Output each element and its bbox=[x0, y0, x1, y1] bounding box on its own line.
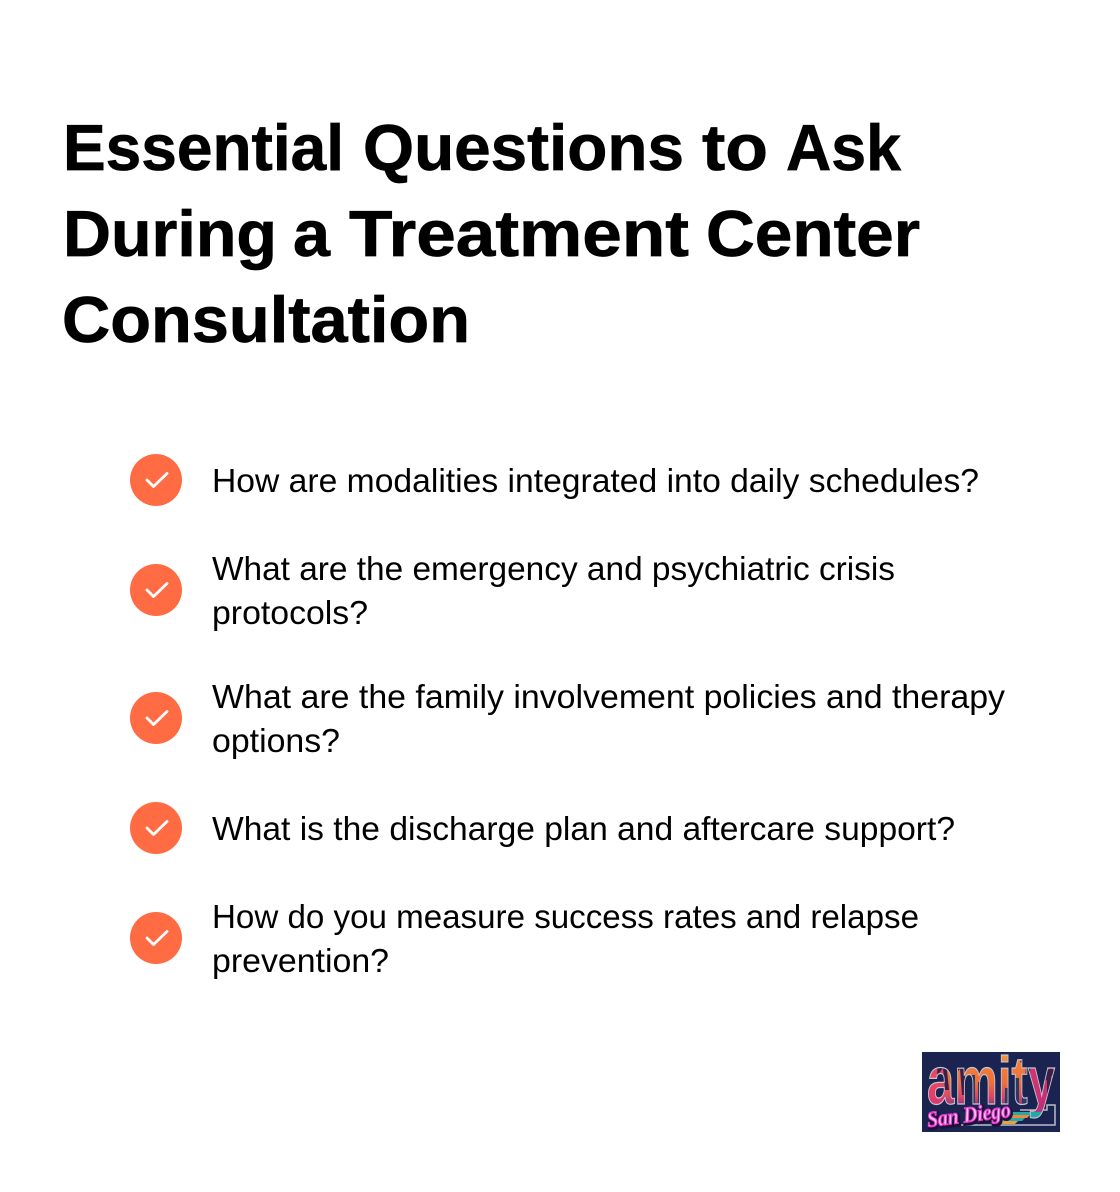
logo stripes bbox=[998, 1112, 1037, 1124]
item 1: How are modalities integrated into daily schedules? bbox=[212, 463, 979, 500]
title: Treatment bbox=[349, 197, 689, 270]
logo: Amity San Diego bbox=[922, 1043, 1060, 1133]
item 2: protocols? bbox=[212, 595, 368, 632]
logo script text: San Diego bbox=[927, 1098, 1013, 1133]
item 2 bbox=[130, 551, 895, 632]
title: Questions bbox=[363, 111, 684, 184]
title: During bbox=[63, 197, 277, 270]
item 3: options? bbox=[212, 723, 340, 760]
item 4: What is the discharge plan and aftercare support? bbox=[212, 811, 955, 848]
item 1 bbox=[130, 454, 979, 506]
title bbox=[62, 111, 920, 356]
title: a bbox=[293, 197, 331, 270]
logo wordmark: amity bbox=[927, 1043, 1055, 1119]
title: Essential bbox=[63, 111, 344, 184]
item 4 bbox=[130, 802, 955, 854]
title: Ask bbox=[786, 111, 902, 184]
logo frame lines bbox=[943, 1105, 1055, 1125]
item 2: What are the emergency and psychiatric crisis bbox=[212, 551, 895, 588]
title: Consultation bbox=[62, 283, 470, 356]
title: to bbox=[702, 111, 768, 184]
item 5: prevention? bbox=[212, 943, 389, 980]
item 3 bbox=[130, 679, 1005, 760]
logo script text: San Diego bbox=[926, 1097, 1012, 1132]
title: Center bbox=[706, 197, 920, 270]
checklist bbox=[130, 454, 1005, 980]
item 5 bbox=[130, 899, 919, 980]
item 5: How do you measure success rates and relapse bbox=[212, 899, 919, 936]
item 3: What are the family involvement policies and therapy bbox=[212, 679, 1005, 716]
